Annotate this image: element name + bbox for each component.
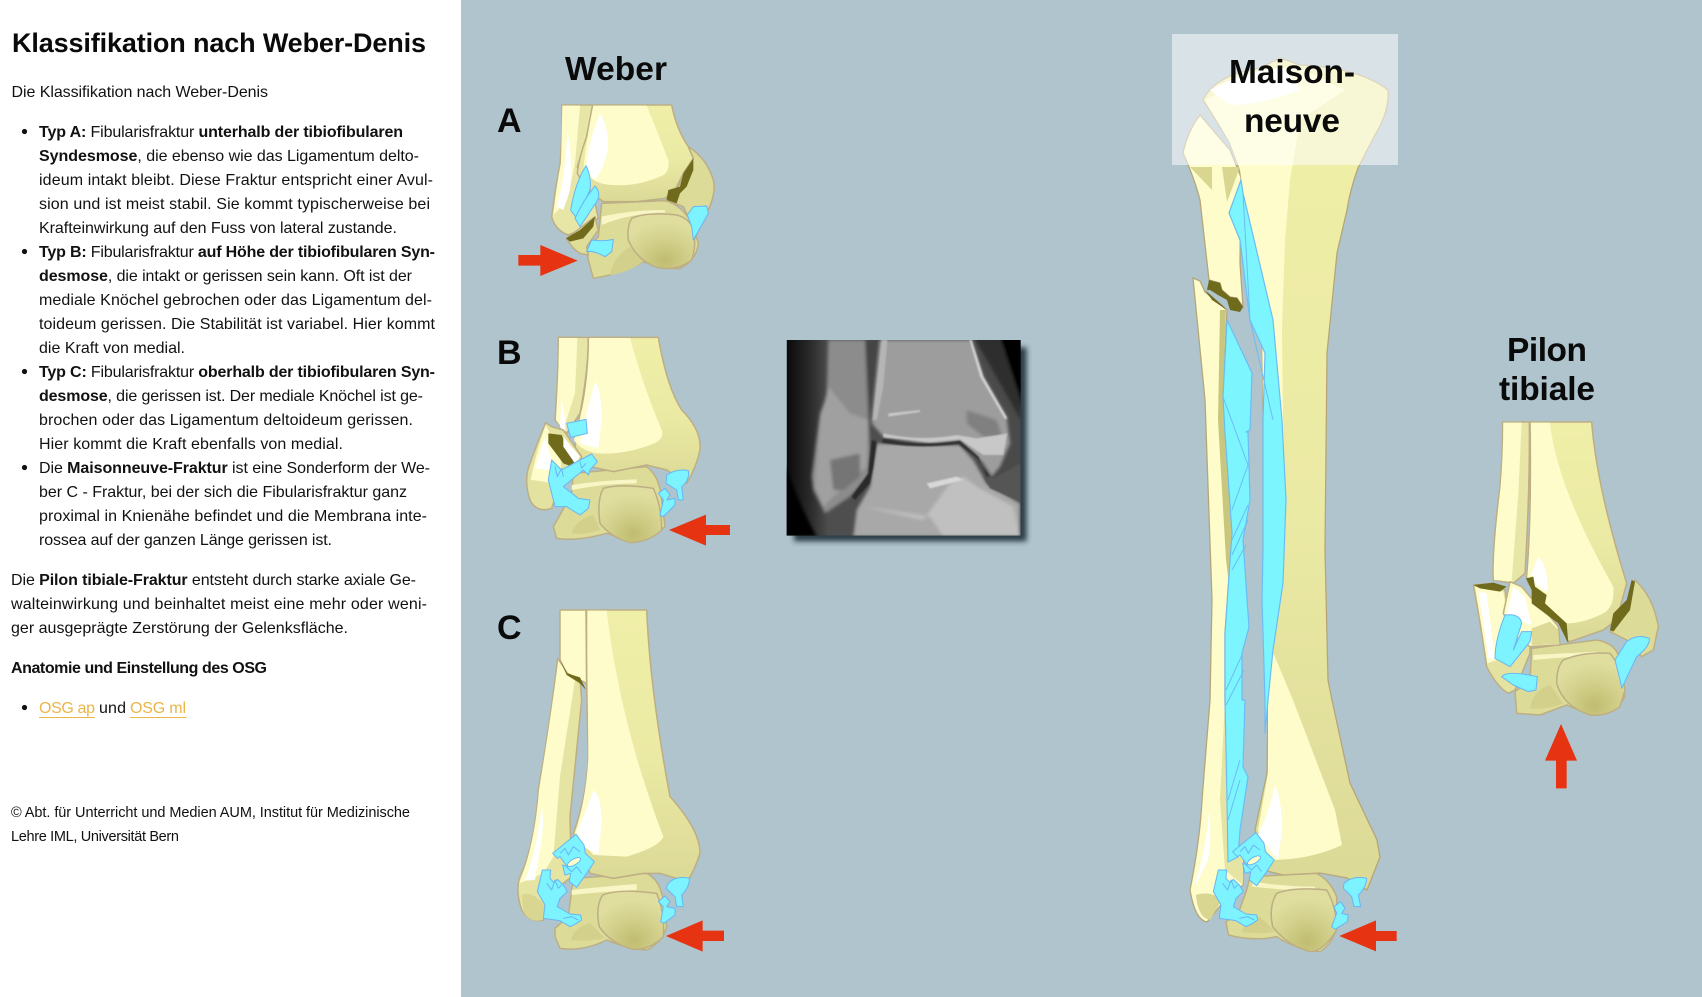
list item: Typ C: Typ C: Fibularisfraktur oberhalb der tibiofibularen Syn- bbox=[39, 364, 435, 381]
list item: Typ C: Hier kommt die Kraft ebenfalls von medial. bbox=[39, 436, 343, 453]
panel: illustrations bbox=[461, 0, 1702, 997]
list item: Typ B: die Kraft von medial. bbox=[39, 340, 185, 357]
list item: Typ B: Typ B: Fibularisfraktur auf Höhe der tibiofibularen Syn- bbox=[39, 244, 435, 261]
links list: OSG ml bbox=[130, 700, 186, 717]
list item: Typ C: brochen oder das Ligamentum deltoideum gerissen. bbox=[39, 412, 413, 429]
arrow: force from medial bbox=[669, 515, 730, 546]
illustration: Weber C bbox=[518, 610, 724, 952]
list item: Maisonneuve: ber C - Fraktur, bei der sich die Fibularisfraktur ganz bbox=[39, 484, 407, 501]
label B: B bbox=[497, 334, 522, 372]
paragraph: Pilon tibiale: Die Pilon tibiale-Fraktur entsteht durch starke axiale Ge- bbox=[11, 572, 416, 589]
arrow: force from lateral bbox=[518, 245, 578, 276]
fibula bbox=[1183, 115, 1243, 307]
list item: Typ A: Krafteinwirkung auf den Fuss von lateral zustande. bbox=[39, 220, 397, 237]
list item: Typ A: sion und ist meist stabil. Sie kommt typischerweise bei bbox=[39, 196, 430, 213]
title: Klassifikation nach Weber-Denis bbox=[12, 28, 426, 58]
label C: C bbox=[497, 609, 522, 647]
panel: text column bbox=[0, 0, 461, 997]
links list: OSG ap bbox=[39, 700, 95, 717]
heading: Maisonneuve: Maison- bbox=[1229, 54, 1355, 91]
copyright bbox=[11, 805, 410, 845]
heading: Maisonneuve: neuve bbox=[1244, 103, 1340, 140]
list item: Typ A: Typ A: Fibularisfraktur unterhalb der tibiofibularen bbox=[39, 124, 403, 141]
copyright: © Abt. für Unterricht und Medien AUM, Institut für Medizinische bbox=[11, 805, 410, 821]
list item: Typ B: toideum gerissen. Die Stabilität ist variabel. Hier kommt bbox=[39, 316, 436, 333]
links list: und bbox=[99, 700, 126, 717]
heading: Pilon tibiale bbox=[1499, 332, 1595, 408]
heading: Pilon tibiale: Pilon bbox=[1507, 332, 1587, 369]
heading: Maisonneuve bbox=[1229, 54, 1355, 140]
ankle detail bbox=[1213, 833, 1397, 952]
illustration: Weber A bbox=[518, 105, 714, 278]
paragraph: Pilon tibiale bbox=[10, 572, 427, 637]
list item: Maisonneuve: proximal in Knienähe befindet und die Membrana inte- bbox=[39, 508, 427, 525]
list item: Maisonneuve bbox=[22, 460, 430, 549]
paragraph: Pilon tibiale: walteinwirkung und beinhaltet meist eine mehr oder weni- bbox=[10, 596, 427, 613]
list item: Typ B: mediale Knöchel gebrochen oder das Ligamentum del- bbox=[39, 292, 432, 309]
arrow: force from medial bbox=[666, 920, 724, 952]
heading: Weber: Weber bbox=[565, 51, 667, 88]
list item: Typ A: ideum intakt bleibt. Diese Fraktur entspricht einer Avul- bbox=[39, 172, 433, 189]
subheading: Anatomie und Einstellung des OSG bbox=[11, 660, 267, 677]
list item: Maisonneuve: rossea auf der ganzen Länge gerissen ist. bbox=[39, 532, 332, 549]
list item: Typ A: Syndesmose, die ebenso wie das Ligamentum delto- bbox=[39, 148, 419, 165]
illustration: Pilon tibiale bbox=[1473, 422, 1658, 788]
overlay box for Maisonneuve heading bbox=[1172, 34, 1398, 165]
ligament: interosseous membrane bbox=[1229, 180, 1286, 733]
label A: A bbox=[497, 102, 522, 140]
list item: Typ B bbox=[22, 244, 436, 357]
list item: Typ B: desmose, die intakt or gerissen sein kann. Oft ist der bbox=[39, 268, 413, 285]
copyright: Lehre IML, Universität Bern bbox=[11, 829, 179, 845]
list item: Maisonneuve: Die Maisonneuve-Fraktur ist eine Sonderform der We- bbox=[39, 460, 430, 477]
intro text: Die Klassifikation nach Weber-Denis bbox=[12, 84, 268, 101]
list item: Typ A bbox=[22, 124, 433, 237]
arrow: axial force bbox=[1545, 724, 1577, 788]
illustration: Maisonneuve bbox=[1183, 58, 1397, 952]
illustration: Weber B bbox=[527, 337, 730, 546]
list item: Typ C bbox=[22, 364, 435, 453]
arrow: force from medial bbox=[1339, 920, 1397, 951]
heading: Pilon tibiale: tibiale bbox=[1499, 371, 1595, 408]
list item: Typ C: desmose, die gerissen ist. Der mediale Knöchel ist ge- bbox=[39, 388, 423, 405]
x-ray image bbox=[783, 337, 1027, 541]
links list bbox=[22, 700, 187, 718]
paragraph: Pilon tibiale: ger ausgeprägte Zerstörung der Gelenksfläche. bbox=[11, 620, 348, 637]
tibia bbox=[1203, 58, 1388, 890]
